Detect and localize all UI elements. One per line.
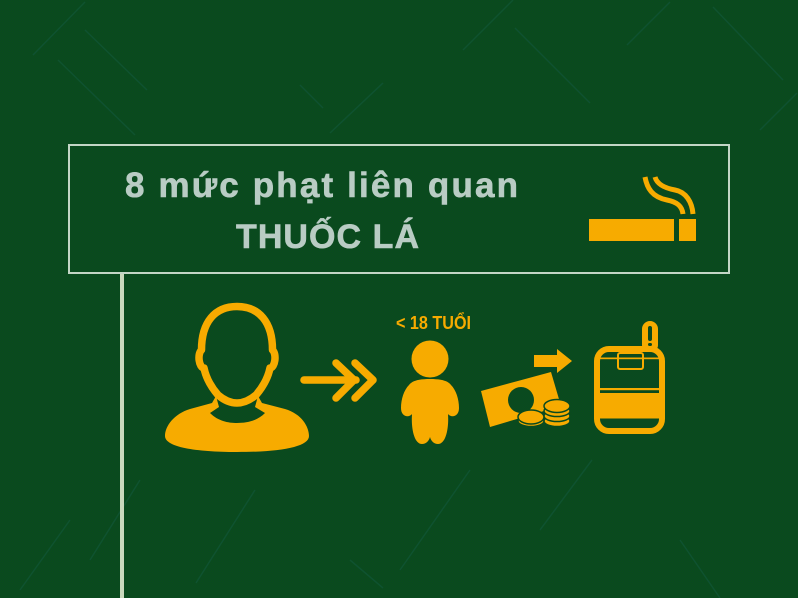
vertical timeline line <box>120 274 124 598</box>
icon: money and coins <box>481 372 570 427</box>
age label: < 18 TUỔI <box>396 312 471 333</box>
header panel <box>69 145 729 273</box>
title line 2: THUỐC LÁ <box>236 217 419 256</box>
banknote <box>481 372 561 427</box>
icon: child <box>401 340 459 444</box>
icon: adult person <box>165 306 309 452</box>
icon: cigarette pack <box>597 321 662 431</box>
icon: cigarette <box>589 177 696 241</box>
coin stack large <box>544 400 570 426</box>
coin stack small <box>518 410 544 426</box>
title line 1: 8 mức phạt liên quan <box>125 166 518 205</box>
arrow: right <box>534 349 572 373</box>
arrow: double chevron <box>304 363 373 398</box>
